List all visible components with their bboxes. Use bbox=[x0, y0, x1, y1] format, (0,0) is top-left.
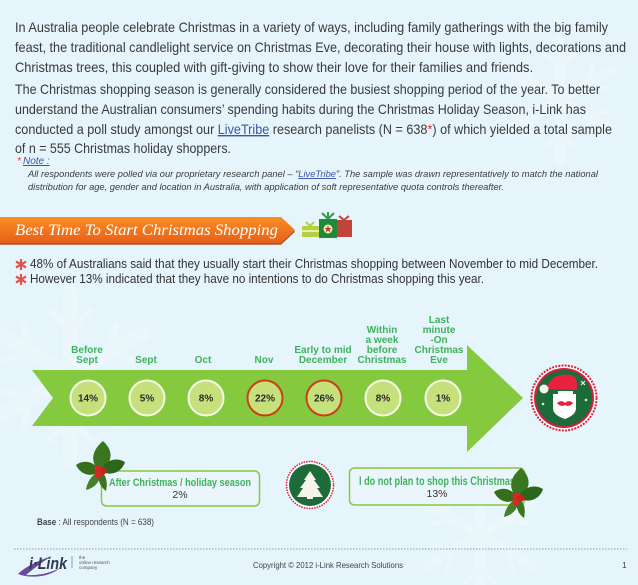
data point: Before Sept 14% bbox=[70, 380, 106, 416]
study description paragraph: conducted a poll study amongst our LiveTribe research panelists (N = 638*) of which yielded a total sample bbox=[15, 121, 612, 137]
callout: after Christmas: After Christmas / holiday season bbox=[109, 477, 251, 489]
study description paragraph bbox=[15, 81, 612, 156]
timeline labels: Sept bbox=[76, 355, 99, 366]
copyright: Copyright © 2012 i-Link Research Solutions bbox=[253, 560, 403, 570]
timeline labels: Christmas bbox=[358, 355, 407, 366]
icon: snowflake bullet 2 bbox=[16, 274, 26, 285]
footnote: All respondents were polled via our proprietary research panel – “LiveTribe”. The sample was drawn representatively to match the national bbox=[27, 169, 599, 180]
key findings bullets bbox=[16, 257, 598, 286]
data point: Last minute 1%: 1% bbox=[436, 394, 450, 404]
data point: Sept 5% bbox=[130, 380, 164, 416]
data point: Before Sept 14%: 14% bbox=[78, 394, 98, 404]
section heading banner bbox=[0, 217, 295, 245]
timeline labels: Oct bbox=[195, 355, 212, 366]
callout: do not plan to shop: I do not plan to shop this Christmas bbox=[359, 476, 515, 488]
key findings bullets: However 13% indicated that they have no intentions to do Christmas shopping this year. bbox=[30, 272, 484, 286]
data point: Oct 8%: 8% bbox=[199, 394, 213, 404]
data point: Sept 5%: 5% bbox=[140, 394, 154, 404]
i-Link logo: i·Link bbox=[29, 554, 68, 573]
icon: snowflake bullet 1 bbox=[16, 259, 26, 270]
callout: do not plan to shop bbox=[350, 468, 524, 505]
timeline labels: minute bbox=[423, 325, 456, 336]
timeline labels: before bbox=[367, 345, 398, 356]
callout: after Christmas: 2% bbox=[172, 489, 188, 501]
i-Link logo: online research bbox=[79, 560, 110, 565]
data point: Nov 22%: 22% bbox=[255, 394, 275, 404]
data point: Early to mid December 26%: 26% bbox=[314, 394, 334, 404]
timeline labels: Before bbox=[71, 345, 103, 356]
icon: holly right bbox=[494, 468, 543, 518]
i-Link logo bbox=[18, 554, 110, 577]
timeline labels: Nov bbox=[255, 355, 274, 366]
key findings bullets: 48% of Australians said that they usually start their Christmas shopping between November to mid December. bbox=[30, 257, 598, 271]
timeline labels: Sept bbox=[135, 355, 158, 366]
icon: Santa badge bbox=[532, 366, 596, 430]
timeline labels: Early to mid bbox=[294, 345, 352, 356]
study description paragraph: understand the Australian consumers’ spending habits during the Christmas Holiday Season, i-Link has bbox=[15, 101, 586, 117]
base note: Base : All respondents (N = 638) bbox=[37, 517, 154, 527]
data point: Early to mid December 26% bbox=[306, 380, 342, 416]
timeline labels: Last bbox=[429, 315, 450, 326]
timeline labels: Within bbox=[367, 325, 397, 336]
study description paragraph: of n = 555 Christmas holiday shoppers. bbox=[15, 140, 231, 156]
i-Link logo: the bbox=[79, 555, 86, 560]
icon: Christmas tree badge bbox=[286, 462, 334, 508]
footnote bbox=[17, 156, 599, 193]
footnote: Note : bbox=[23, 156, 50, 167]
footnote: distribution for age, gender and location in Australia, with application of soft representative quota controls thereafter. bbox=[28, 182, 504, 193]
page number: 1 bbox=[622, 560, 627, 570]
intro paragraph: Christmas trees, this coupled with gift-giving to show their love for their families and friends. bbox=[15, 59, 533, 75]
data point: Last minute 1% bbox=[426, 380, 460, 416]
timeline arrow chart bbox=[32, 315, 523, 452]
timeline labels: a week bbox=[366, 335, 399, 346]
icon: gift boxes bbox=[302, 212, 352, 238]
timeline labels: Eve bbox=[430, 355, 448, 366]
timeline labels bbox=[71, 315, 464, 366]
intro paragraph bbox=[15, 19, 626, 75]
data point: Nov 22% bbox=[248, 380, 282, 416]
section heading banner: Best Time To Start Christmas Shopping bbox=[15, 222, 278, 239]
timeline labels: -On bbox=[430, 335, 448, 346]
arrow bbox=[32, 345, 523, 452]
timeline labels: December bbox=[299, 355, 347, 366]
data point: Oct 8% bbox=[188, 380, 224, 416]
icon: holly left bbox=[76, 441, 125, 491]
data point: Within a week 8% bbox=[366, 380, 400, 416]
data point: Within a week 8%: 8% bbox=[376, 394, 390, 404]
footnote: * bbox=[17, 156, 22, 167]
i-Link logo: company bbox=[79, 565, 98, 570]
timeline labels: Christmas bbox=[415, 345, 464, 356]
callout: do not plan to shop: 13% bbox=[426, 488, 448, 500]
callout: after Christmas bbox=[102, 471, 260, 506]
